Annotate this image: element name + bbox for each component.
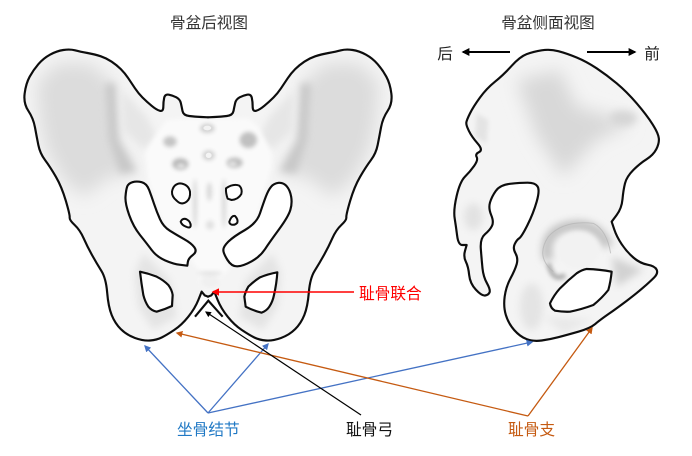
arrows: pubic ramus [177,328,592,416]
lateral obturator foramen [550,269,612,312]
arrow: pubic arch [206,312,361,415]
sacrum and coccyx [145,118,272,291]
hip bone and sacrum fill with shading [456,51,658,340]
pelvis posterior view [17,40,399,347]
label: pubic symphysis: 耻骨联合 [359,285,422,303]
right sciatic opening [223,183,292,266]
posterior view outline [24,50,392,341]
label: pubic ramus: 耻骨支 [508,421,555,439]
lateral view outline [454,50,659,341]
label: posterior direction: 后 [437,45,453,63]
arrow: pubic symphysis [213,291,354,293]
arrow: anterior [587,51,635,53]
label: pubic arch: 耻骨弓 [346,421,393,439]
pelvis lateral view [447,43,667,347]
arrows: ischial tuberosity [145,342,532,413]
left obturator foramen [140,272,173,312]
pubic arch marker [195,301,223,317]
label: anterior direction: 前 [644,45,660,63]
left sciatic opening [125,182,196,266]
label: ischial tuberosity: 坐骨结节 [177,421,240,439]
sacral foramina [172,183,242,228]
heading: posterior view: 骨盆后视图 [170,14,248,32]
right obturator foramen [244,272,277,313]
right hip bone fill [208,50,390,340]
acetabulum rim detail [543,223,611,272]
heading: lateral view: 骨盆侧面视图 [501,14,595,32]
arrow: posterior [463,51,510,53]
left hip bone fill [26,50,208,340]
